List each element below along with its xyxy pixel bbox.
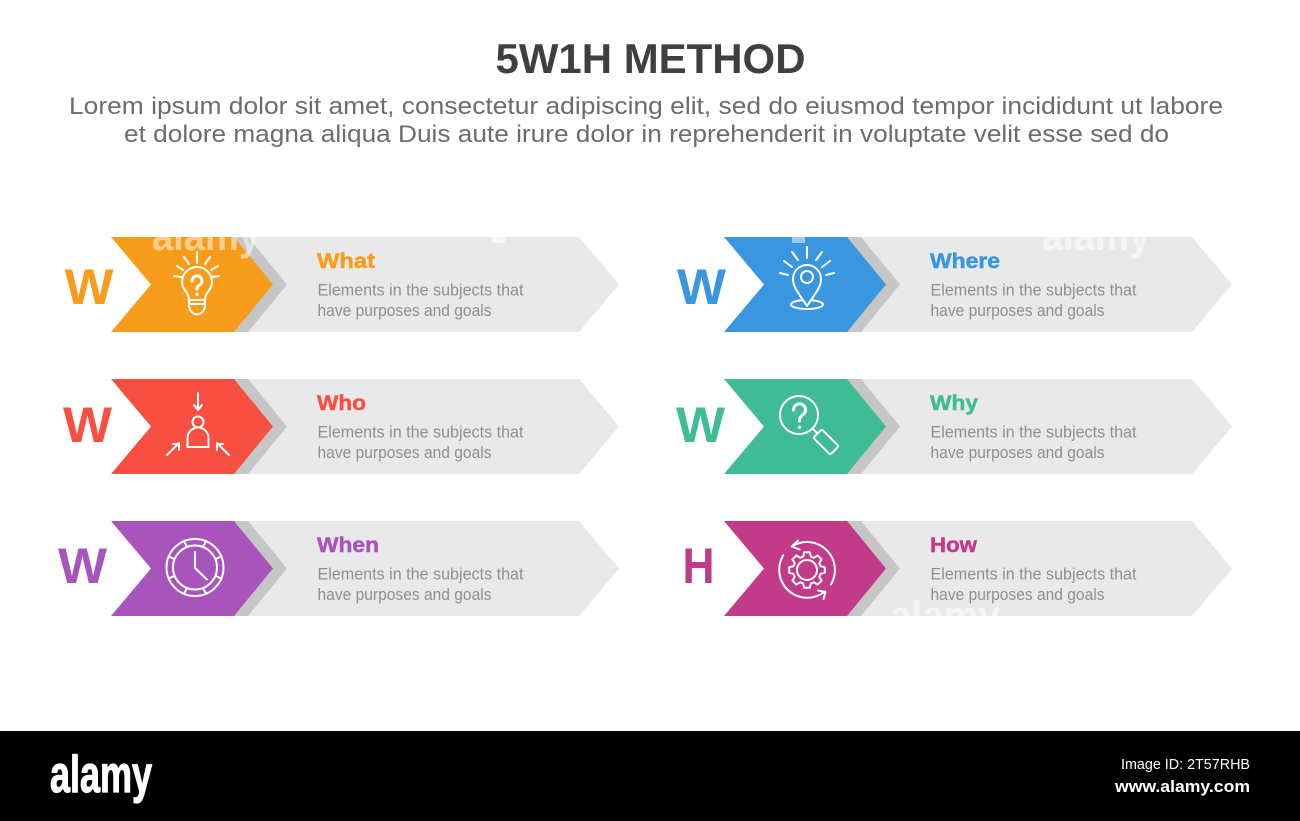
panel: what [64,237,619,332]
arrow shadow: who [234,379,287,474]
letter: why: W [676,397,726,453]
arrow background: who [240,379,619,474]
letter: how: H [682,538,714,594]
description: why: have purposes and goals [930,443,1104,462]
icon: clock [166,539,224,596]
description: how: have purposes and goals [930,585,1104,604]
heading: who: Who [317,392,366,415]
watermark fragments [153,237,1146,616]
description: when: Elements in the subjects that [318,564,524,584]
description: who [318,422,524,462]
description: how: Elements in the subjects that [930,564,1137,584]
watermark fragments: alamy [152,212,261,259]
icon: magnifier with question mark [780,396,839,455]
subtitle text: et dolore magna aliqua Duis aute irure dolor in reprehenderit in voluptate velit esse sed do [124,121,1169,148]
description: what: have purposes and goals [318,301,492,320]
heading: how: How [930,534,978,557]
description: what: Elements in the subjects that [318,280,524,300]
description: when [318,564,524,604]
footer logo: alamy [50,746,152,804]
description: who: Elements in the subjects that [318,422,524,442]
letter: what: W [64,259,114,315]
arrow shadow: what [234,237,287,332]
description: when: have purposes and goals [318,585,492,604]
arrow shadow: why [847,379,900,474]
heading: when: When [317,534,379,557]
chevron: when [111,521,273,616]
chevron: who [111,379,273,474]
subtitle text: Lorem ipsum dolor sit amet, consectetur adipiscing elit, sed do eiusmod tempor incididunt ut labore [69,93,1223,120]
letter: who: W [63,397,113,453]
website: www.alamy.com [1114,777,1250,796]
image id: Image ID: 2T57RHB [1121,756,1250,773]
heading: where: Where [930,250,1000,273]
arrow background: when [240,521,619,616]
chevron: why [724,379,886,474]
arrow shadow: when [234,521,287,616]
description: how [930,564,1137,604]
subtitle text [69,93,1223,148]
icon: location pin [780,247,834,309]
watermark fragments: alamy [890,592,1001,639]
arrow background: why [853,379,1232,474]
description: where: have purposes and goals [930,301,1104,320]
icon: light bulb with question mark [174,252,219,314]
description: where [930,280,1137,320]
description: who: have purposes and goals [318,443,492,462]
panel: who [63,379,619,474]
panel: how [682,521,1232,616]
description: why [930,422,1137,462]
description: why: Elements in the subjects that [930,422,1137,442]
watermark fragments: alamy [1042,212,1151,259]
arrow background: what [240,237,619,332]
description: what [318,280,524,320]
title: 5W1H METHOD [496,35,806,82]
description: where: Elements in the subjects that [930,280,1137,300]
panel: where [677,237,1232,332]
panel: why [676,379,1232,474]
heading: what: What [317,250,375,273]
arrow shadow: where [847,237,900,332]
arrow background: where [853,237,1232,332]
letter: when: W [58,538,108,594]
icon: gear with cycle arrows [779,540,835,599]
arrow background: how [853,521,1232,616]
footer bar [0,731,1300,821]
letter: where: W [677,259,727,315]
chevron: what [111,237,273,332]
chevron: how [724,521,886,616]
chevron: where [724,237,886,332]
icon: person with arrows [167,393,229,455]
panel: when [58,521,619,616]
arrow shadow: how [847,521,900,616]
heading: why: Why [930,392,978,415]
